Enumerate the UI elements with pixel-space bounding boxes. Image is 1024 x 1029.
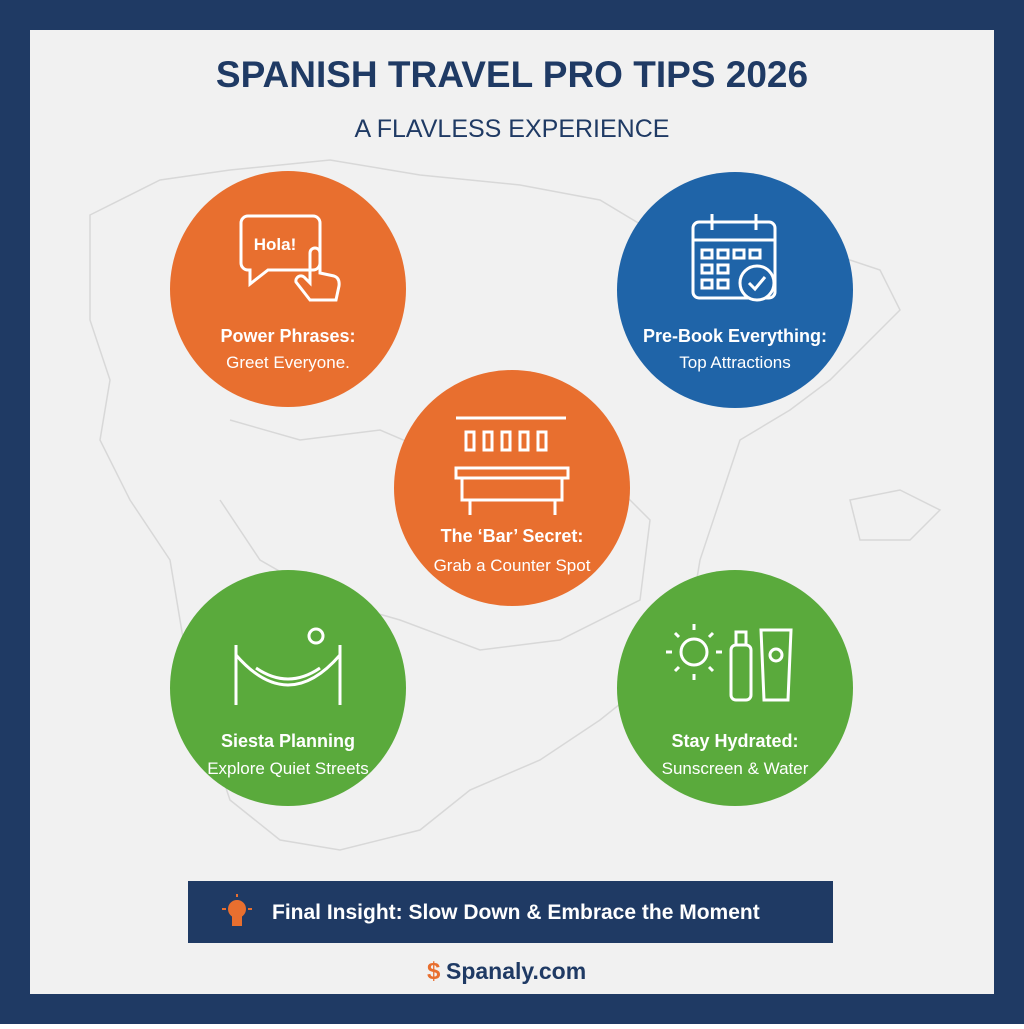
icon: calendar	[693, 214, 775, 300]
logo: $	[427, 958, 441, 985]
panel: power phrases: Power Phrases:	[220, 326, 356, 346]
panel: bar secret: The ‘Bar’ Secret:	[441, 526, 583, 546]
icon: lightbulb	[222, 894, 252, 925]
panel: bar secret	[394, 370, 630, 606]
icon: bar counter	[456, 418, 568, 515]
panel: hydrated	[617, 570, 853, 806]
panel: pre-book: Top Attractions	[679, 353, 791, 372]
banner: final insight	[188, 881, 833, 943]
logo: Spanaly.com	[446, 958, 586, 984]
panel: siesta: Explore Quiet Streets	[207, 759, 369, 778]
icon: speech bubble	[241, 216, 339, 300]
title: SPANISH TRAVEL PRO TIPS 2026	[216, 54, 808, 95]
icon: sun bottle sunscreen	[666, 624, 791, 700]
panel: hydrated: Sunscreen & Water	[662, 759, 809, 778]
panel: pre-book	[617, 172, 853, 408]
panel: hydrated: Stay Hydrated:	[671, 731, 799, 751]
panel: bar secret: Grab a Counter Spot	[434, 556, 591, 575]
panel: power phrases	[170, 171, 406, 407]
panel: power phrases: Hola!	[254, 235, 296, 254]
icon: hammock	[236, 629, 340, 705]
panel: siesta: Siesta Planning	[221, 731, 355, 751]
banner: final insight: Final Insight: Slow Down & Embrace the Moment	[272, 901, 760, 924]
panel: pre-book: Pre-Book Everything:	[643, 326, 827, 346]
subtitle: A FLAVLESS EXPERIENCE	[355, 115, 669, 143]
panel: power phrases: Greet Everyone.	[226, 353, 350, 372]
map outline	[90, 160, 940, 850]
panel: siesta	[170, 570, 406, 806]
